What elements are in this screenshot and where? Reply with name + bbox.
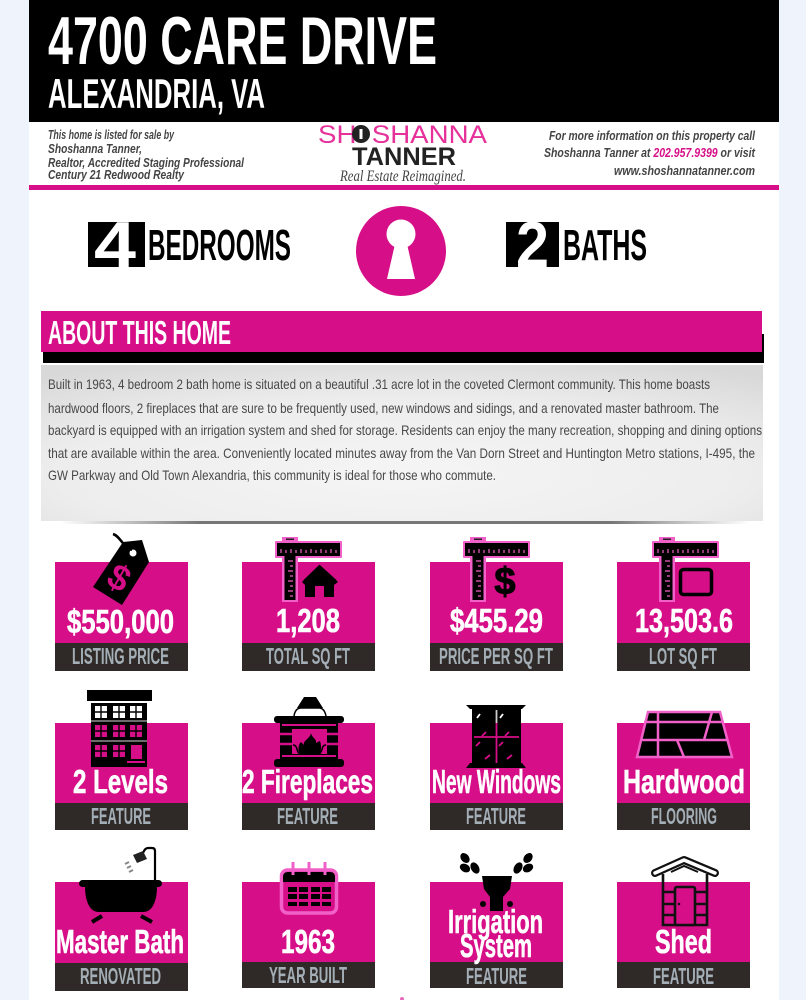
card: listing price — [55, 534, 188, 671]
card: total sq ft: TOTAL SQ FT — [266, 643, 350, 669]
card: year built — [242, 862, 375, 988]
panel: about text: GW Parkway and Old Town Alexandria, this community is ideal for those who commute. — [48, 467, 496, 483]
card: levels — [55, 690, 188, 830]
contact text: Shoshanna Tanner at 202.957.9399 or visit — [544, 146, 756, 160]
card: master bath — [55, 848, 188, 991]
listing agent text: This home is listed for sale by — [48, 128, 175, 142]
subtitle: ALEXANDRIA, VA — [48, 70, 265, 117]
card: irrigation system: FEATURE — [466, 963, 527, 989]
icon: keyhole circle — [356, 206, 446, 296]
logo — [318, 121, 487, 185]
number box 4 — [88, 208, 145, 281]
panel: about text — [41, 365, 763, 524]
panel: about this home heading — [41, 311, 764, 363]
number box 2: 2 — [516, 208, 549, 281]
card: hardwood: Hardwood — [623, 763, 745, 800]
card: irrigation system: Irrigation — [448, 903, 543, 940]
header band — [29, 0, 779, 122]
number box 2 — [506, 208, 559, 281]
card: price per sq ft — [430, 537, 563, 671]
icon: fireplace — [274, 697, 344, 767]
icon: bathtub and shower — [79, 848, 162, 922]
icon: sprinkler — [458, 851, 535, 911]
card: shed: FEATURE — [653, 963, 714, 989]
panel: about this home heading: ABOUT THIS HOME — [48, 314, 231, 351]
card: shed — [617, 860, 750, 989]
contact text: www.shoshannatanner.com — [614, 164, 755, 178]
card: master bath: Master Bath — [56, 923, 184, 960]
contact text — [544, 129, 756, 178]
icon: price tag: $ — [100, 555, 138, 600]
card: price per sq ft: $455.29 — [450, 602, 543, 639]
pink divider — [29, 185, 779, 190]
logo: Real Estate Reimagined. — [339, 168, 466, 185]
card: hardwood — [617, 712, 750, 830]
card: new windows — [430, 705, 563, 830]
card: levels: 2 Levels — [73, 763, 168, 800]
baths stat: BATHS — [563, 221, 647, 270]
card: price per sq ft: PRICE PER SQ FT — [439, 643, 553, 669]
card: lot sq ft — [617, 537, 750, 671]
card: year built: 1963 — [281, 923, 335, 960]
card: shed: Shed — [655, 923, 712, 960]
icon: calendar — [282, 862, 336, 913]
card: fireplaces: 2 Fireplaces — [242, 763, 373, 800]
card: listing price: LISTING PRICE — [72, 643, 169, 669]
card: irrigation system: System — [460, 927, 532, 964]
bottom pink mark — [400, 997, 404, 1000]
card: fireplaces — [242, 697, 375, 830]
card: listing price: $550,000 — [67, 603, 174, 640]
card: lot sq ft: LOT SQ FT — [649, 643, 717, 669]
card: fireplaces: FEATURE — [277, 803, 338, 829]
logo: SH SHANNA — [318, 121, 487, 149]
listing agent text — [48, 128, 244, 182]
card: total sq ft: 1,208 — [276, 602, 340, 639]
logo keyhole o — [352, 125, 370, 143]
bedrooms stat: BEDROOMS — [148, 221, 291, 270]
icon: floor planks — [637, 712, 732, 757]
title: 4700 CARE DRIVE — [48, 3, 437, 79]
card: levels: FEATURE — [91, 803, 151, 829]
icon: shed — [655, 860, 715, 925]
bedrooms stat — [88, 208, 291, 281]
contact text: For more information on this property call — [549, 129, 755, 143]
number box 4: 4 — [94, 208, 136, 281]
card: master bath: RENOVATED — [80, 963, 161, 989]
baths stat — [506, 208, 647, 281]
listing agent text: Century 21 Redwood Realty — [48, 168, 185, 182]
card: new windows: FEATURE — [466, 803, 526, 829]
listing agent text: Shoshanna Tanner, — [48, 142, 142, 156]
icon: ruler and house — [275, 537, 342, 602]
logo: TANNER — [352, 143, 456, 171]
icon: ruler and lot rectangle — [652, 537, 719, 602]
icon: window — [466, 705, 526, 768]
listing agent text: Realtor, Accredited Staging Professional — [48, 156, 244, 170]
card: hardwood: FLOORING — [651, 803, 717, 829]
card: new windows: New Windows — [432, 763, 561, 800]
card: irrigation system — [430, 851, 563, 989]
card: total sq ft — [242, 537, 375, 671]
icon: building — [87, 690, 152, 767]
card: lot sq ft: 13,503.6 — [635, 602, 733, 639]
icon: ruler and dollar: $ — [494, 561, 516, 603]
card: year built: YEAR BUILT — [269, 962, 347, 988]
